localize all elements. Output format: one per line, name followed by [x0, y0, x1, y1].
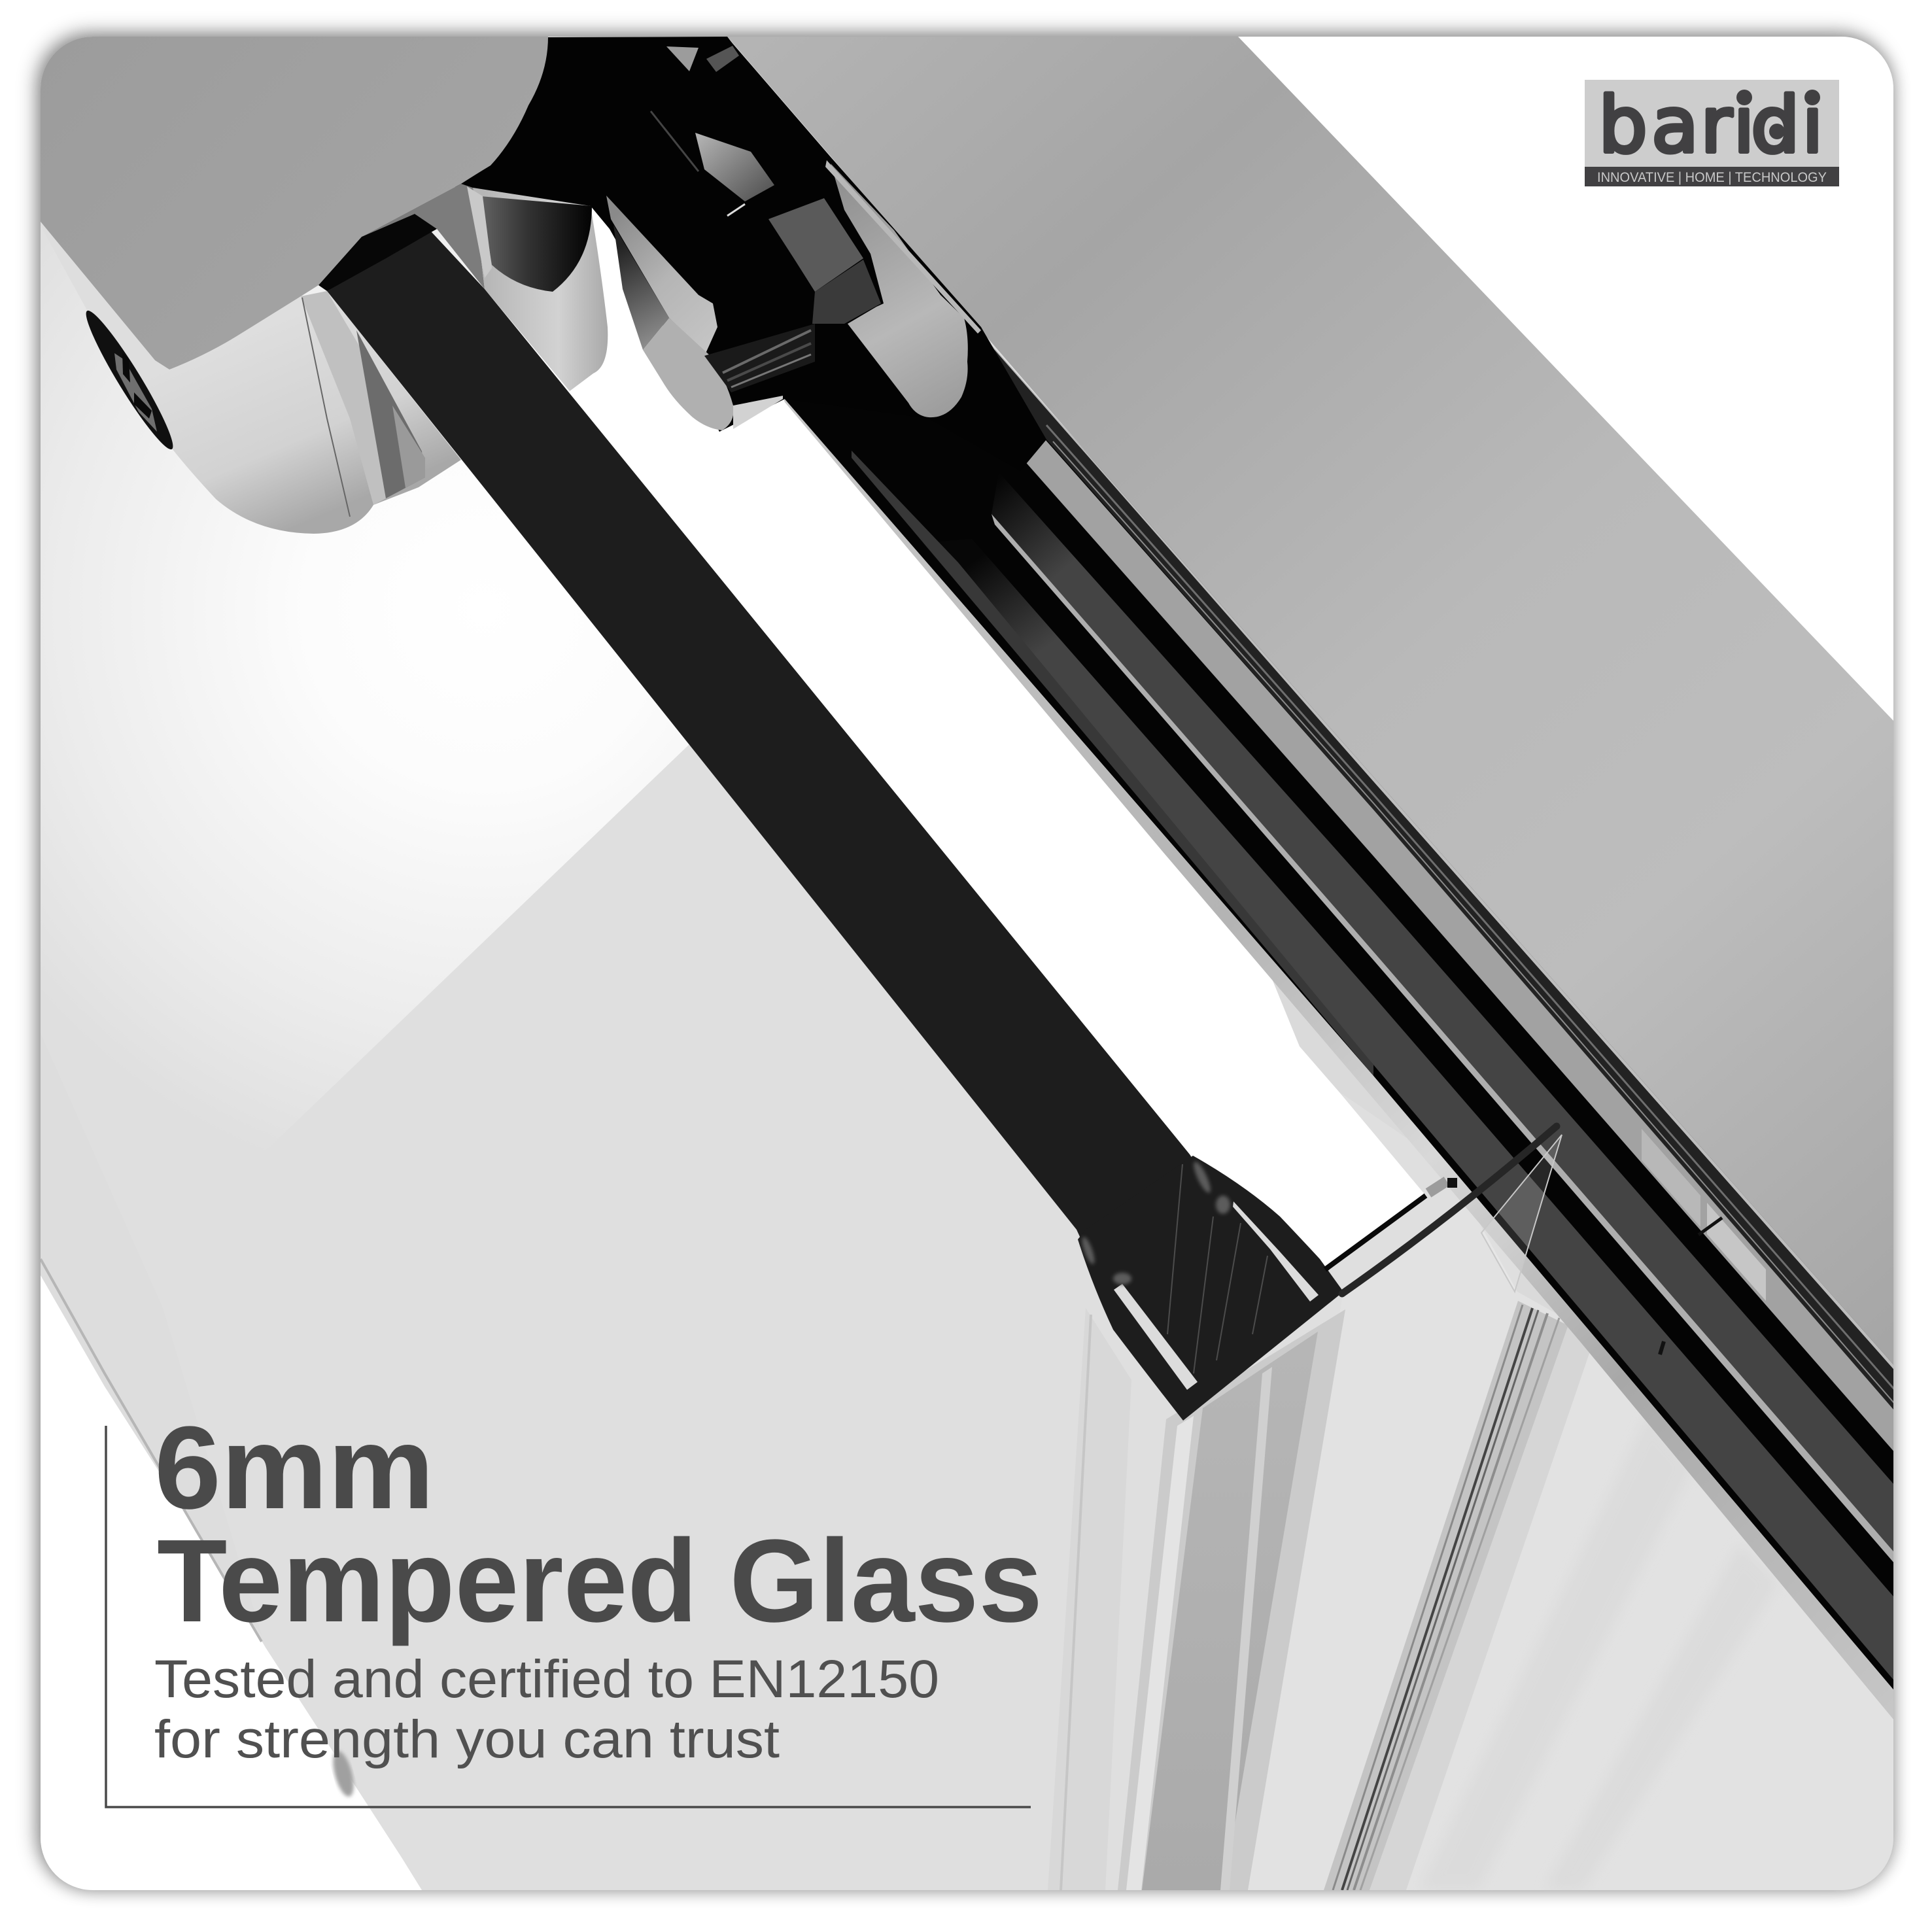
long seal fin: [1342, 1126, 1557, 1294]
heading line one: 6mm: [154, 1402, 434, 1534]
rail lower dark grey band: [922, 539, 1932, 1725]
top rail assembly: [546, 37, 1932, 1766]
wall bracket chrome body: [41, 222, 461, 534]
wall bracket top grey face: [41, 37, 548, 370]
bracket seam strips: [301, 291, 425, 517]
chrome cylinder right of opening: [606, 196, 783, 430]
bar black top cap: [319, 214, 437, 291]
rail light strip: [992, 514, 1932, 1607]
seal left streak: [1060, 1315, 1092, 1890]
lower left darker glass pane: [41, 1033, 262, 1635]
bracket screw hole: [78, 305, 181, 455]
base panel background: [61, 47, 62, 48]
heading line two: Tempered Glass: [157, 1515, 1043, 1647]
rail light lower edge: [783, 397, 1932, 1766]
top right white corner: [1238, 37, 1893, 721]
thin black seal wire: [1325, 1196, 1426, 1269]
glass fixing hole: [331, 1749, 356, 1799]
chrome cylinder left of opening: [467, 186, 608, 391]
description line two: for strength you can trust: [154, 1710, 780, 1769]
black rail mass at bracket: [451, 37, 1046, 471]
lower left white wedge: [41, 1275, 422, 1890]
pale mounting plate behind rail: [1273, 981, 1339, 1092]
logo tagline bar: [1585, 167, 1839, 186]
rail reflection marks: [1642, 1129, 1766, 1302]
callout frame lines: [106, 1426, 1031, 1807]
logo wordmark: baridi: [1598, 80, 1823, 170]
seal dark streak group: [1324, 1301, 1596, 1890]
seal wire black end: [1447, 1178, 1457, 1188]
top right grey glass plate: [727, 37, 1893, 1387]
rail upper dark grey band: [992, 472, 1932, 1596]
logo: [1585, 80, 1839, 186]
translucent fin sliver: [1481, 1135, 1562, 1292]
description line one: Tested and certified to EN12150: [154, 1649, 939, 1709]
rail light outer edge: [992, 346, 1893, 1370]
dark striped collar: [704, 324, 815, 392]
logo tagline: INNOVATIVE | HOME | TECHNOLOGY: [1597, 170, 1827, 185]
rail fine lines band: [993, 349, 1893, 1409]
reflected bar mark in rail: [1660, 1341, 1664, 1354]
rail grey strip: [1009, 440, 1932, 1495]
seal end profile: [1078, 1156, 1343, 1421]
rail lower trim: [852, 451, 1373, 1076]
chrome neck beside bar cap: [362, 184, 485, 289]
faint glass streaks right: [1419, 1413, 1779, 1890]
glass edge line: [41, 1259, 262, 1642]
large chrome carriage: [831, 164, 968, 417]
lower glass light area: [1230, 1130, 1932, 1932]
black gasket bar: [327, 214, 1243, 1334]
carriage light stripe: [825, 160, 981, 334]
logo light background: [1585, 80, 1839, 167]
logo letter dots: [1736, 90, 1820, 139]
upper left lit glass area: [41, 229, 689, 1074]
seal central grey band: [1118, 1309, 1345, 1890]
seal wire grey tab: [1428, 1181, 1447, 1193]
white opening between bar and rail: [485, 196, 1426, 1269]
grey reflective facets in rail: [651, 46, 881, 324]
